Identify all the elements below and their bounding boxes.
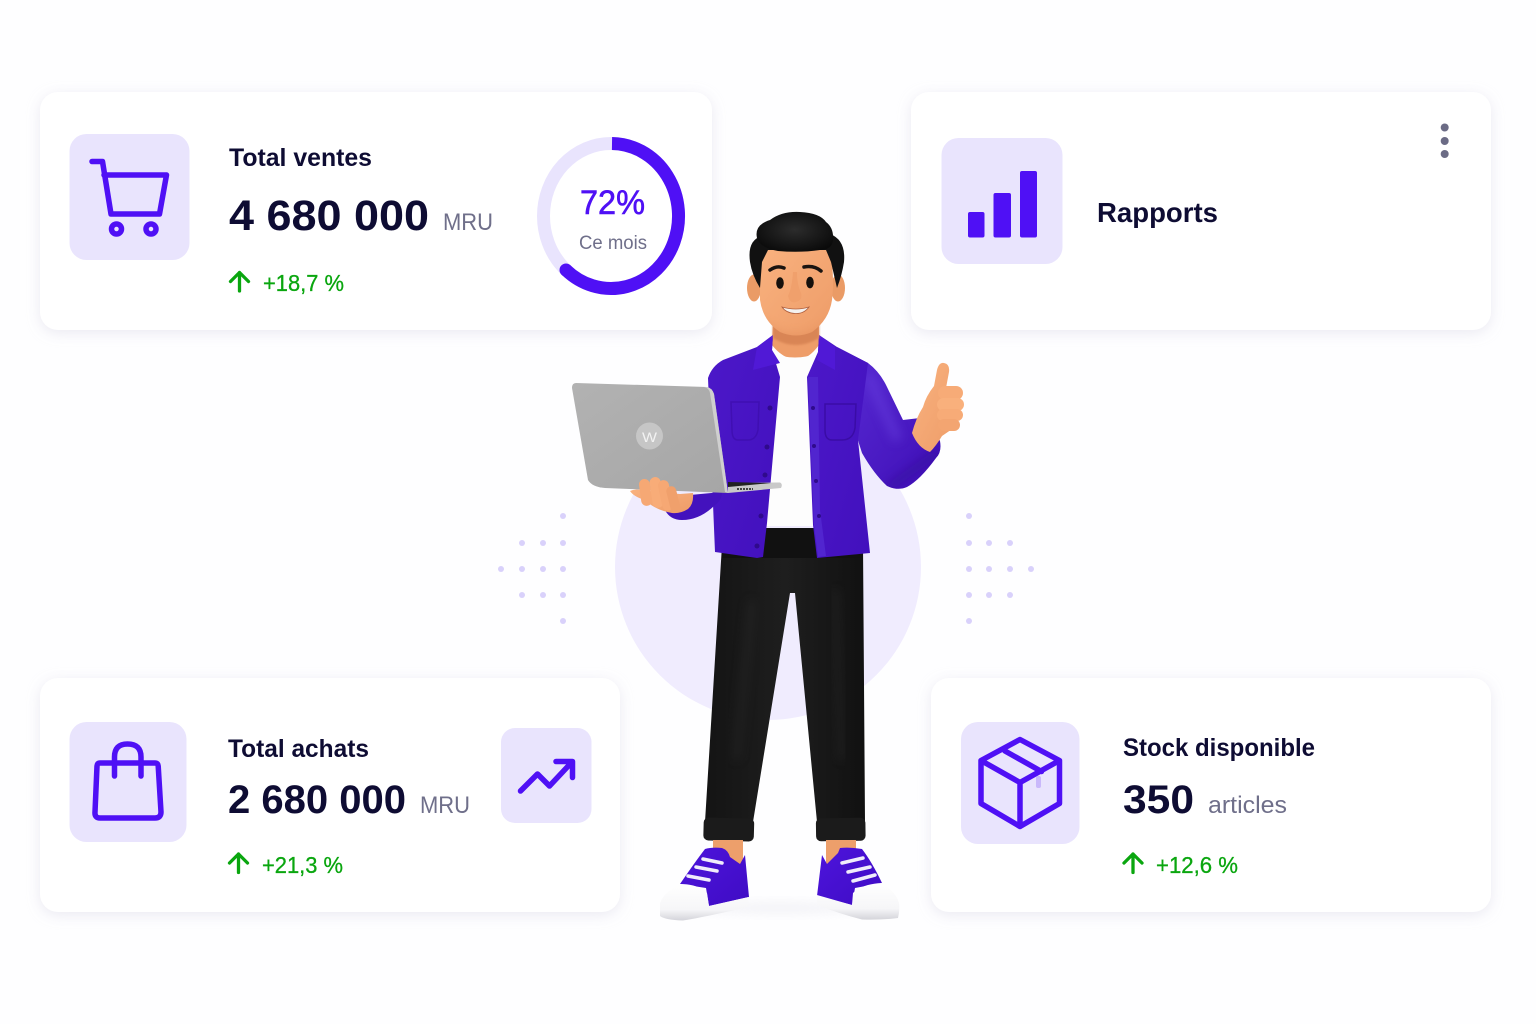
panel: total ventes [40, 92, 712, 330]
chart: progress ring 72%: 72% [580, 184, 645, 222]
left sleeve [665, 492, 722, 520]
icon: shopping cart [70, 134, 190, 260]
left shoe [660, 848, 749, 920]
panel: rapports [911, 92, 1491, 330]
laptop logo [636, 422, 663, 450]
right ear [831, 274, 845, 302]
chart: progress ring 72%: Ce mois [579, 233, 647, 254]
icon: bar chart [942, 138, 1062, 264]
value: purchases amount: 2 680 000 [228, 778, 406, 822]
trousers [703, 528, 866, 842]
icon: up arrow [230, 272, 248, 291]
left collar [753, 335, 780, 370]
icon: up arrow [1124, 854, 1142, 872]
t-shirt [767, 353, 818, 526]
neck shadow [773, 322, 819, 345]
face [760, 246, 833, 336]
neck [772, 318, 819, 360]
right collar [817, 335, 835, 370]
unit: articles: articles [1208, 792, 1287, 819]
trend: +12,6 %: +12,6 % [1156, 852, 1238, 878]
floor shadow [695, 902, 865, 914]
unit: MRU: MRU [443, 209, 493, 236]
value: sales amount: 4 680 000 [229, 192, 429, 240]
eyes [776, 277, 814, 289]
icon: up arrow [230, 854, 248, 872]
right arm sleeve [837, 347, 940, 489]
smile [782, 307, 809, 314]
hand holding laptop [630, 476, 693, 514]
head [747, 212, 845, 345]
trend: +21,3 %: +21,3 % [262, 852, 343, 878]
right shoe [817, 848, 899, 920]
heading: stock disponible: Stock disponible [1123, 734, 1315, 762]
dot grid: left [498, 513, 566, 624]
nose [788, 272, 801, 302]
chart: progress ring 72% [544, 144, 679, 288]
heading: total ventes: Total ventes [229, 144, 372, 172]
icon: package box [961, 722, 1080, 844]
unit: MRU: MRU [420, 792, 470, 819]
laptop logo: W [642, 429, 658, 445]
heading: rapports: Rapports [1097, 197, 1218, 228]
left ear [747, 274, 761, 302]
jacket body [708, 335, 870, 558]
ankles [713, 840, 856, 864]
trend: +18,7 %: +18,7 % [263, 270, 344, 296]
panel: stock disponible [931, 678, 1491, 912]
heading: total achats: Total achats [228, 735, 369, 763]
face shading [780, 332, 794, 335]
icon: shopping bag [70, 722, 186, 842]
hair quiff [757, 212, 833, 252]
icon: trending up [501, 728, 592, 823]
value: 350: 350 [1123, 778, 1194, 822]
eyebrows [770, 266, 821, 271]
panel: total achats [40, 678, 620, 912]
icon: menu dots [1441, 124, 1449, 158]
thumbs-up hand [912, 363, 964, 452]
dot grid: right [966, 513, 1034, 624]
laptop [572, 383, 782, 493]
side hair [750, 234, 844, 288]
illustration: man with laptop giving thumbs up [572, 212, 964, 920]
background circle [615, 414, 921, 720]
